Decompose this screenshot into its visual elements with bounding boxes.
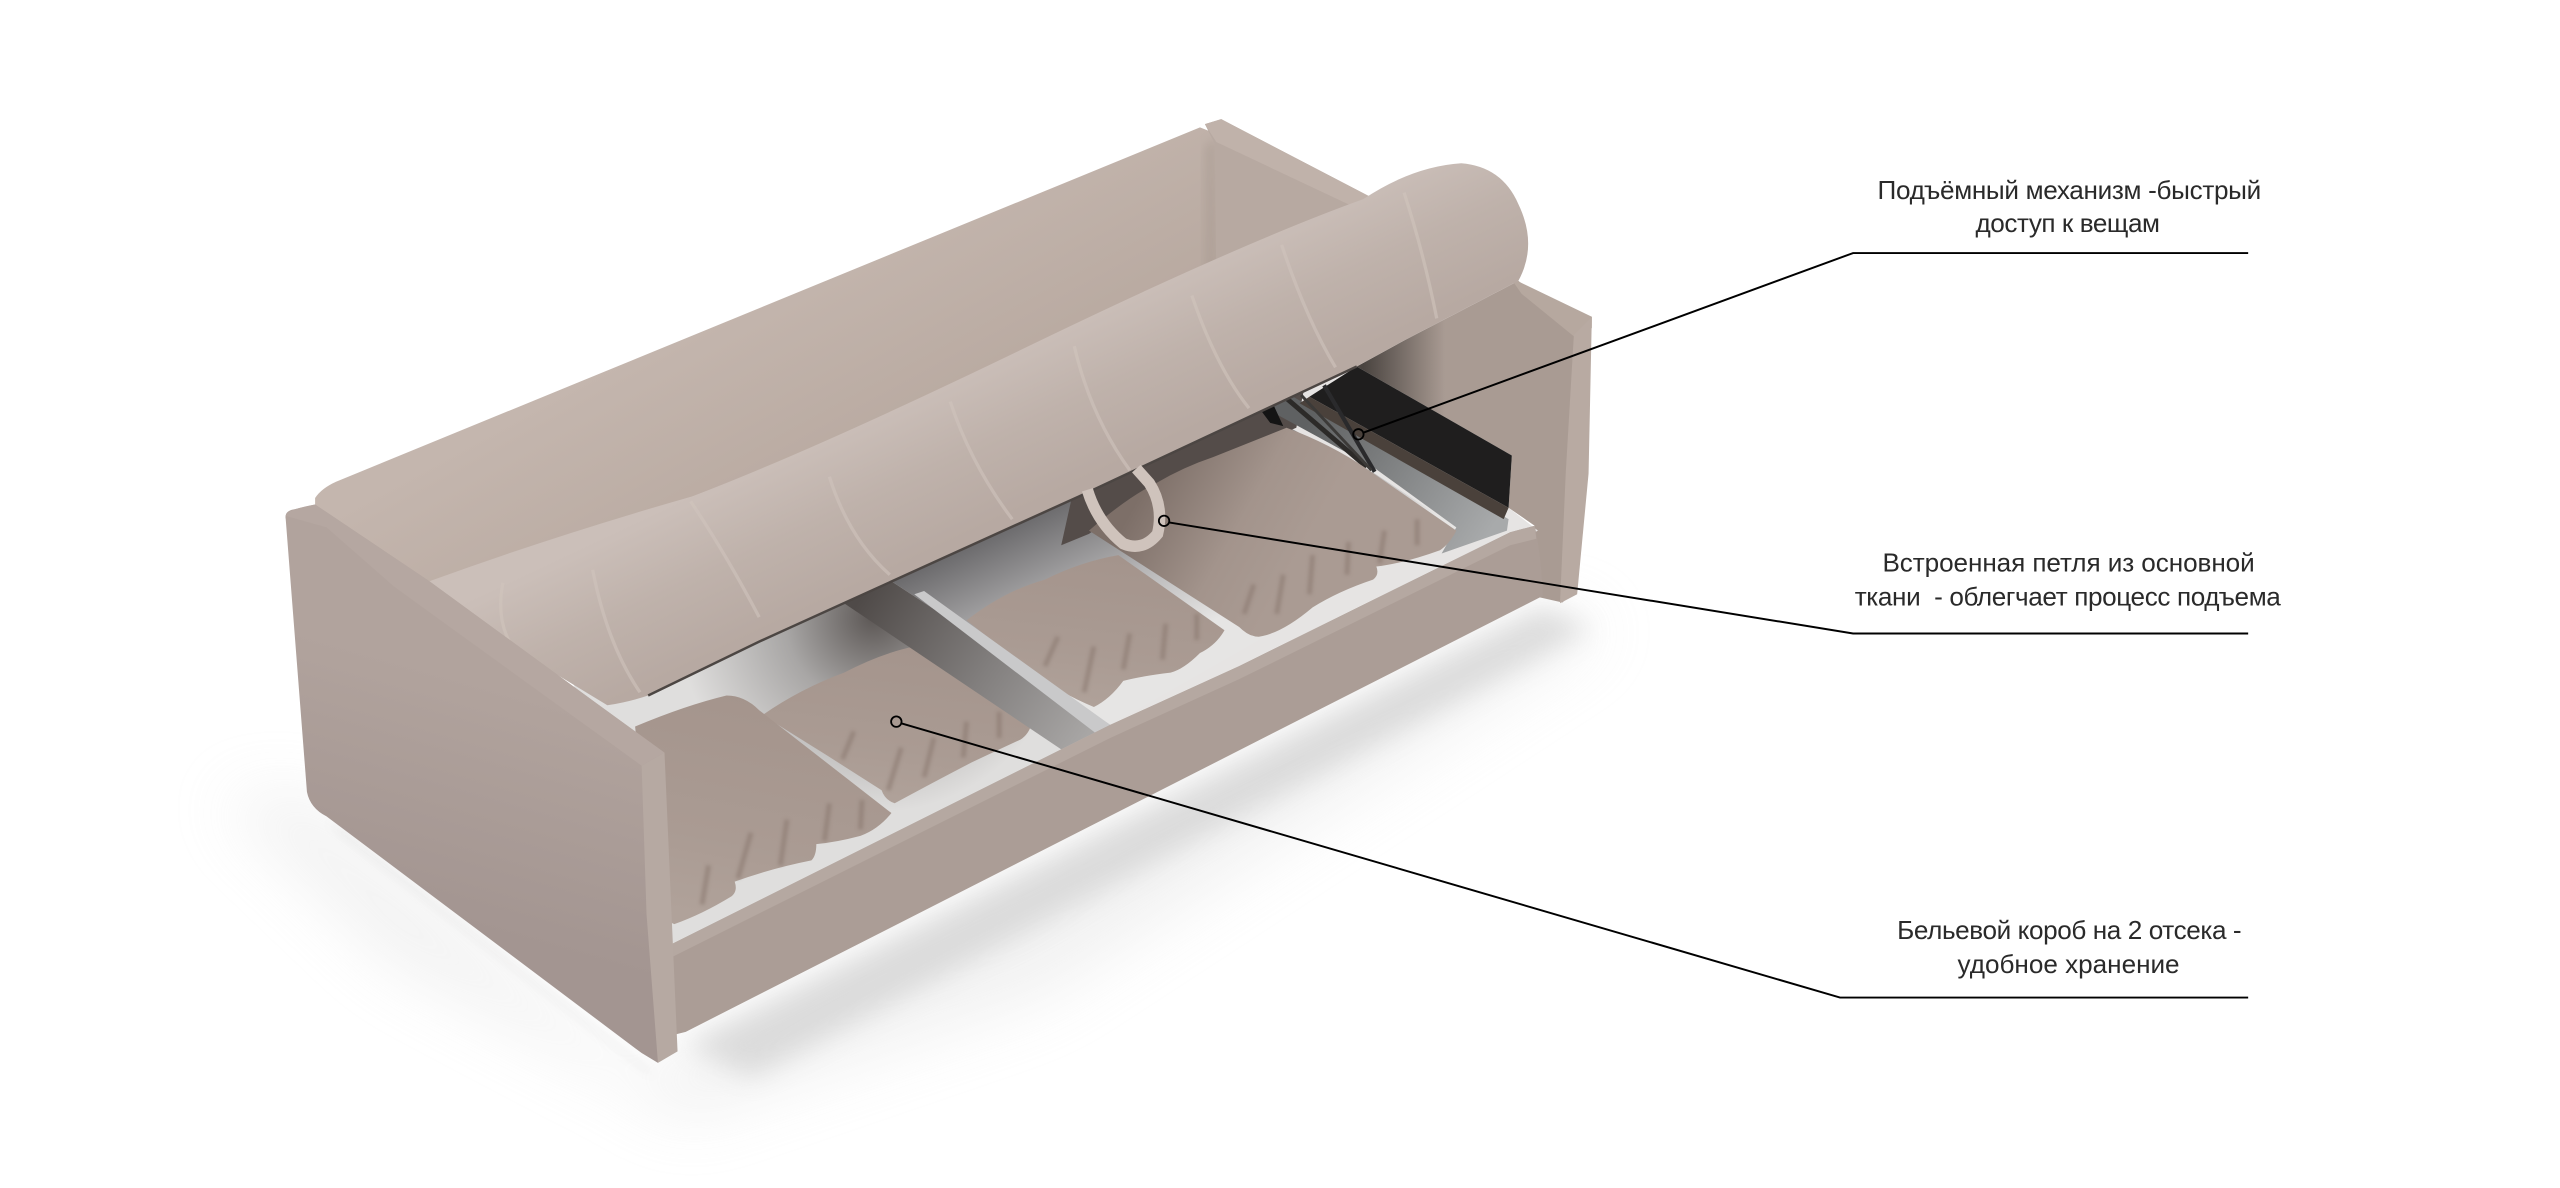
cushion loop strap	[1087, 469, 1160, 546]
callout: storage box: удобное хранение	[1958, 949, 2180, 979]
pillow: front left	[635, 696, 891, 924]
pillow: front right	[762, 647, 1032, 803]
lifted seat cushion	[429, 163, 1528, 705]
callout: cushion loop	[1159, 516, 2281, 633]
near arm of the sofa	[285, 504, 678, 1063]
near arm face	[285, 504, 664, 1063]
front rail	[673, 526, 1543, 1035]
left compartment	[563, 602, 1061, 955]
cushion seams	[501, 193, 1437, 692]
back wall of the sofa	[315, 127, 1218, 686]
callout: lifting mechanism: Подъёмный механизм -быстрый	[1878, 175, 2261, 205]
pillow: back left	[967, 555, 1224, 707]
callout: lifting mechanism	[1353, 175, 2261, 440]
cushion underside line	[648, 367, 1357, 696]
lifting mechanism	[1260, 367, 1512, 553]
callout: storage box: Бельевой короб на 2 отсека -	[1897, 915, 2242, 945]
callout: cushion loop: Встроенная петля из основной	[1882, 547, 2255, 577]
floor shadow	[220, 607, 1608, 1118]
callout: cushion loop: ткани - облегчает процесс подъема	[1855, 582, 2281, 612]
near arm rim	[286, 504, 664, 766]
pillow: back right	[1089, 428, 1456, 637]
dark back band	[1061, 379, 1306, 545]
right compartment	[891, 428, 1456, 725]
near arm front strip	[642, 753, 678, 1063]
callout: storage box	[891, 716, 2248, 998]
box divider	[844, 581, 1110, 749]
storage box interior	[563, 367, 1538, 967]
far arm of the sofa	[1205, 119, 1592, 603]
callout: lifting mechanism: доступ к вещам	[1976, 208, 2160, 238]
